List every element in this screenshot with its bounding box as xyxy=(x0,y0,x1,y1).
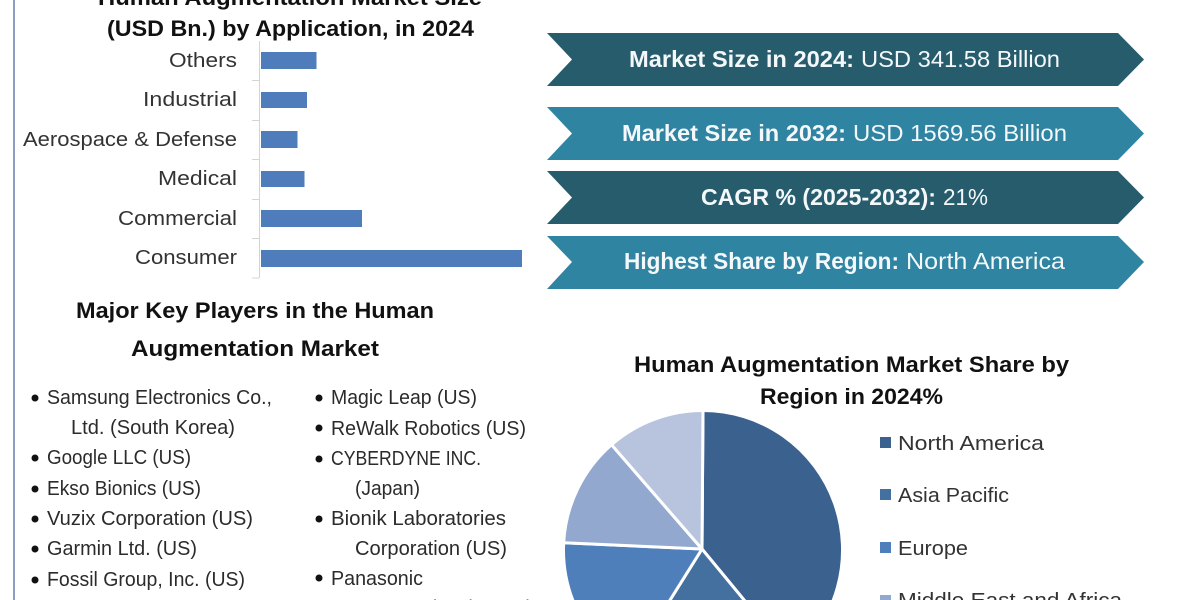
bar category labels: Aerospace & Defense xyxy=(23,129,237,151)
key players list: left column: Ltd. (South Korea) xyxy=(71,417,235,439)
bar category labels: Consumer xyxy=(135,247,237,269)
pie chart title xyxy=(634,352,1070,409)
pie chart xyxy=(564,410,843,600)
banner: CAGR: 21% xyxy=(943,184,988,210)
banner: highest share by region: Highest Share by Region: xyxy=(624,248,899,274)
banner: market size 2032 xyxy=(547,107,1144,160)
key players list: left column: Fossil Group, Inc. (US) xyxy=(47,569,245,591)
key players list: right column: ReWalk Robotics (US) xyxy=(331,418,526,440)
key players list: right column: Bionik Laboratories xyxy=(331,508,506,530)
key players list: right column: (Japan) xyxy=(355,478,420,500)
banner: highest share by region: North America xyxy=(906,248,1065,274)
key players list: left column: Ekso Bionics (US) xyxy=(47,478,201,500)
bar category labels: Others xyxy=(169,50,237,72)
bar category labels: Commercial xyxy=(118,208,237,230)
key players list: right column: Magic Leap (US) xyxy=(331,387,477,409)
key players list: right column xyxy=(316,387,533,600)
key players list: left column: Vuzix Corporation (US) xyxy=(47,508,253,530)
bar chart axis xyxy=(252,41,260,278)
pie legend: Europe xyxy=(898,538,968,560)
bar category labels: Medical xyxy=(158,168,237,190)
key players heading: Major Key Players in the Human xyxy=(76,298,434,323)
banner: market size 2024: USD 341.58 Billion xyxy=(861,46,1060,72)
pie legend xyxy=(880,433,1123,600)
banner: market size 2024: Market Size in 2024: xyxy=(629,46,854,72)
bar chart title xyxy=(98,0,482,41)
key players list: left column: Garmin Ltd. (US) xyxy=(47,538,197,560)
key players heading xyxy=(76,298,434,361)
key players list: left column: Samsung Electronics Co., xyxy=(47,387,272,409)
bar chart title: (USD Bn.) by Application, in 2024 xyxy=(107,16,475,41)
bar chart panel: market size by application xyxy=(23,0,522,278)
banner: market size 2032: Market Size in 2032: xyxy=(622,120,846,146)
pie chart title: Region in 2024% xyxy=(760,384,943,409)
banner: highest share by region xyxy=(547,236,1144,289)
bar category labels: Industrial xyxy=(143,89,237,111)
banner: CAGR xyxy=(547,171,1144,224)
key players list: right column: CYBERDYNE INC. xyxy=(331,448,481,470)
key players list: left column xyxy=(32,387,272,591)
pie legend: Asia Pacific xyxy=(898,485,1009,507)
key players list: right column: Panasonic xyxy=(331,568,423,590)
bars xyxy=(261,52,522,267)
banner: CAGR: CAGR % (2025-2032): xyxy=(701,184,936,210)
pie legend: North America xyxy=(898,433,1045,455)
panel: market share by region xyxy=(564,352,1123,600)
key players list: right column: Corporation (US) xyxy=(355,538,507,560)
banner: market size 2032: USD 1569.56 Billion xyxy=(853,120,1067,146)
bar category labels xyxy=(23,50,237,269)
panel: major key players xyxy=(32,298,533,600)
banner: market size 2024 xyxy=(547,33,1144,86)
pie chart title: Human Augmentation Market Share by xyxy=(634,352,1070,377)
key players heading: Augmentation Market xyxy=(131,336,380,361)
key players list: left column: Google LLC (US) xyxy=(47,447,191,469)
